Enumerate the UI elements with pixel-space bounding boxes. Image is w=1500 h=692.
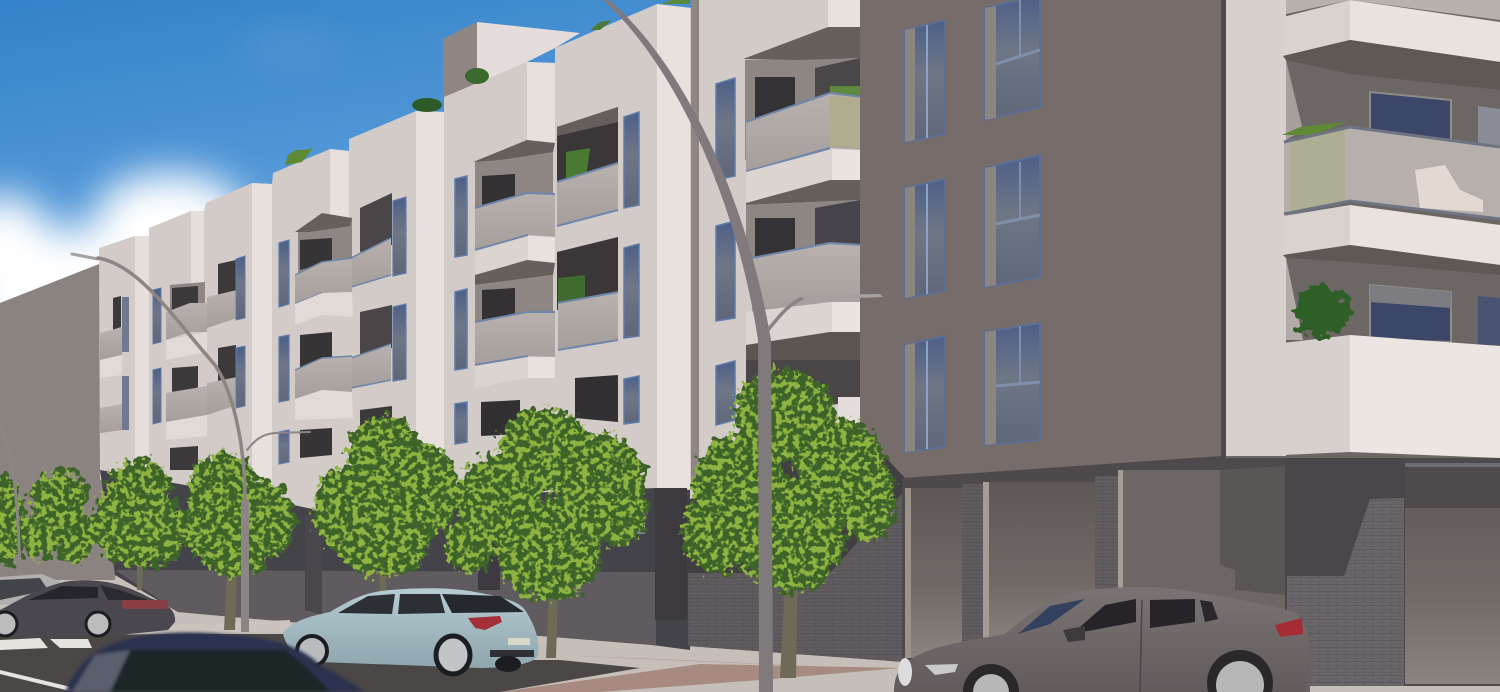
blurred dark foreground car <box>65 632 365 692</box>
balconies: bay D <box>295 193 392 458</box>
icon: balcony plant <box>1295 286 1349 338</box>
street lamp: foreground <box>603 0 883 692</box>
narrow windows: bay B <box>624 112 639 424</box>
balconies: bay E <box>166 260 237 470</box>
clouds <box>0 41 340 340</box>
grey SUV car <box>894 587 1311 692</box>
ground: road and pavement <box>0 620 900 692</box>
narrow windows: bay C <box>455 176 467 444</box>
right corner block with balconies <box>1226 0 1500 458</box>
tree canopies: sunlit leaves <box>0 369 896 600</box>
tree trunks <box>137 560 798 678</box>
tree canopies: shaded foliage <box>0 369 896 600</box>
street lamp: far <box>0 425 58 575</box>
facade windows <box>905 0 1040 452</box>
podium: brick wall under grey facade <box>688 430 905 662</box>
balconies: bay C <box>473 140 555 436</box>
balconies: bay F <box>100 296 129 433</box>
ground backdrop <box>0 570 1500 692</box>
shop front level <box>902 456 1500 692</box>
light blue hatchback car <box>283 588 538 674</box>
white apartment block mass <box>99 0 870 520</box>
silver car, far left <box>0 574 70 605</box>
narrow windows: bay E <box>153 256 245 424</box>
podium: left ground floor <box>100 470 690 650</box>
narrow windows: bay A <box>716 78 735 425</box>
rooftop plants <box>285 0 690 165</box>
main grey facade <box>860 0 1222 478</box>
distant grey building <box>0 264 125 580</box>
street lamp: middle <box>72 254 310 632</box>
balconies: bay A <box>743 27 863 431</box>
dark saloon car <box>0 580 175 637</box>
narrow windows: bay D <box>279 197 406 464</box>
balconies: bay B <box>557 107 618 422</box>
